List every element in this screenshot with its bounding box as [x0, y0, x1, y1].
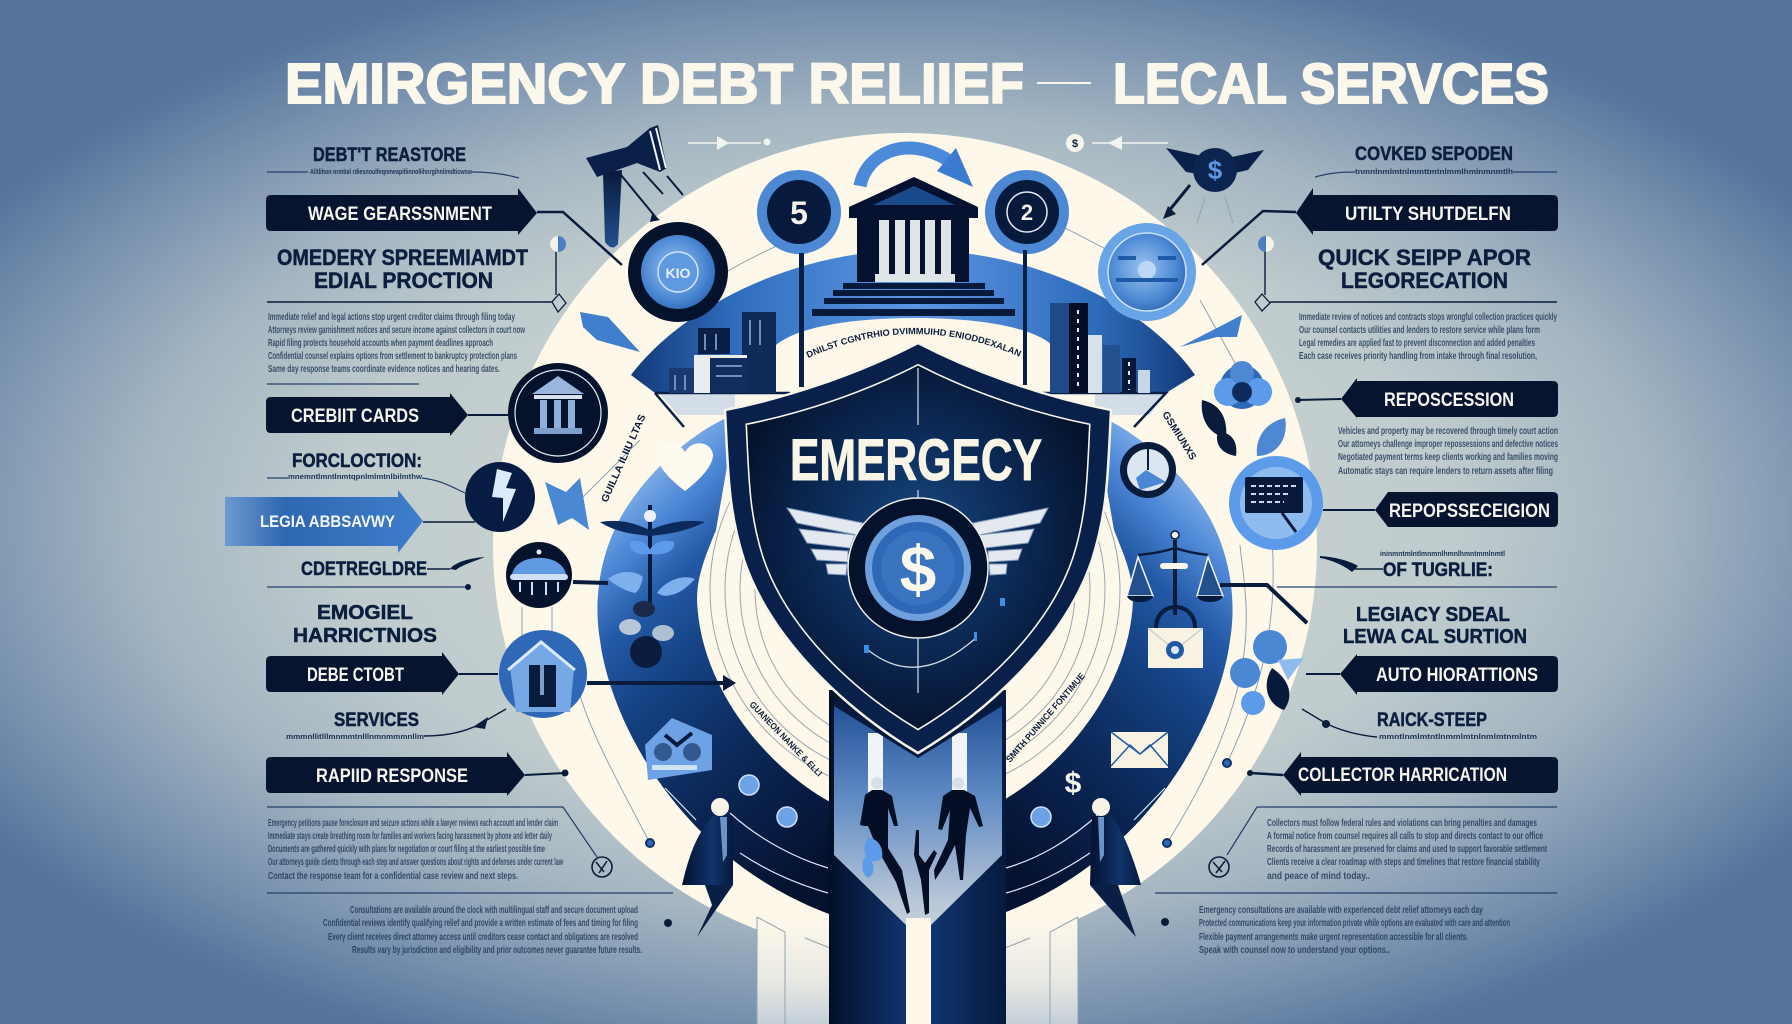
icon: number five badge [757, 170, 841, 387]
connector with dot [1247, 770, 1283, 776]
bar: auto: AUTO HIORATTIONS [1376, 665, 1538, 686]
figure: right person [934, 777, 983, 880]
bar: collector [1283, 752, 1558, 796]
shield field [746, 365, 1090, 730]
bar: rapid response [266, 752, 525, 796]
arrow top right: $ [1072, 138, 1078, 150]
icon: plant [1230, 630, 1304, 715]
icon: number five badge: 5 [790, 195, 808, 231]
coin: $ [900, 532, 936, 606]
marker lower left [267, 807, 612, 877]
heading: emergency proctection: OMEDERY SPREEMIAMDT [277, 245, 528, 270]
heart [657, 443, 713, 491]
central emblem: concentric circles [493, 133, 1317, 1024]
figure: centre fork [914, 830, 937, 915]
badge: bell [506, 542, 572, 608]
kite left lower [545, 478, 589, 530]
body text block four: Legal remedies are applied fast to prevent disconnection and added penalties [1299, 338, 1535, 349]
shield outer [725, 343, 1111, 753]
caduceus [600, 505, 705, 668]
connector: wage to dial [537, 212, 622, 265]
blue leaf cluster [862, 838, 882, 878]
icon: winged coin [1163, 148, 1264, 223]
icon: lower left face badge [645, 718, 712, 780]
heading: emergency proctection: EDIAL PROCTION [314, 268, 493, 293]
heading: foreclosure: mnemntlmntlnmtqpnlmlmtnlbilmthw [288, 472, 422, 481]
body text block one: Attorneys review garnishment notices and secure income against collectors in court now [268, 325, 525, 336]
body text block one: Rapid filing protects household accounts when payment deadlines approach [268, 338, 493, 349]
badge: dial left [628, 222, 728, 322]
body text block six: A formal notice from counsel requires all calls to stop and directs contact to our office [1267, 831, 1543, 842]
body text block one: Confidential counsel explains options from settlement to bankruptcy protection plans [268, 351, 517, 362]
body text block five: Vehicles and property may be recovered through timely court action [1338, 426, 1558, 437]
bar: credit cards [266, 393, 468, 436]
body text block seven: Flexible payment arrangements make urgent representation accessible for all clients. [1199, 932, 1468, 943]
icon: scales with envelope lock [1127, 531, 1223, 668]
heading: debt restore [267, 145, 519, 178]
body text block five: Automatic stays can require lenders to return assets after filing [1338, 466, 1553, 477]
badge: monitor [1229, 456, 1323, 550]
ring dots [646, 759, 1231, 847]
figure: caped man right [1090, 798, 1141, 937]
icon: winged coin: $ [1208, 155, 1223, 185]
white ribbon stripes [868, 733, 967, 803]
arrow top left [688, 136, 770, 150]
heading: services: mmmnllitlllmnmmtnlllnmnmmmnllm [286, 732, 424, 741]
cream lower strips [757, 917, 1078, 1024]
heading: emergency proctection [277, 245, 528, 293]
cream centre stripe [906, 918, 931, 1024]
body text block five [1338, 426, 1558, 477]
bar: wage garnishment: WAGE GEARSSNMENT [308, 204, 492, 225]
body text block four: Immediate review of notices and contracts stops wrongful collection practices quickly [1299, 312, 1557, 323]
bar: collector: COLLECTOR HARRICATION [1298, 765, 1507, 786]
concentric arcs around the shield [710, 385, 1120, 795]
curved caption under dome: DNILST CGNTRHIO DVIMMUIHD ENIODDEXALAND [806, 328, 1022, 358]
right column [1155, 144, 1558, 956]
heading: of trouble [1277, 549, 1557, 587]
body text block seven: Protected communications keep your information private while options are evaluated with care and attention [1199, 918, 1510, 929]
body text block five: Our attorneys challenge improper repossessions and defective notices [1338, 439, 1558, 450]
body text block two: Contact the response team for a confidential case review and next steps. [268, 871, 518, 882]
rotated ring caption left: GUILLA ILIIU LTAS [600, 413, 649, 504]
heading: quick step [1318, 245, 1531, 293]
small ring medallions [739, 775, 1051, 827]
dome inner cream [776, 318, 1052, 393]
rotated ring caption lower right: SMITH PUNNICE FONTIMUE [1004, 671, 1087, 764]
connector: scales elbow [1220, 585, 1307, 623]
body text block six: and peace of mind today.. [1267, 871, 1370, 882]
icon: blue flower [1202, 361, 1286, 456]
body text block seven: Speak with counsel now to understand your options.. [1199, 945, 1390, 956]
bar: wage garnishment [266, 188, 537, 235]
heading: debt restore: DEBT'T REASTORE [313, 145, 466, 166]
wings left [787, 508, 863, 575]
left column [225, 145, 673, 956]
heading: emotional harriers: EMOGIEL [317, 602, 413, 624]
wings right [973, 508, 1048, 575]
dome base supports [655, 393, 1166, 427]
heading: collector: CDETREGLDRE [301, 559, 427, 580]
body text block two: Documents are gathered quickly with plans for negotiation or court filing at the earliest possible time [268, 844, 545, 855]
rotated ring caption lower left: GUANEON NANKE & ELLI [748, 699, 824, 778]
title: EMIRGENCY DEBT RELIIEF [285, 52, 1024, 116]
heading: foreclosure: FORCLOCTION: [292, 451, 422, 472]
bar: debt: DEBE CTOBT [307, 665, 404, 686]
body text block one: Immediate relief and legal actions stop urgent creditor claims through filing today [268, 312, 515, 323]
bar: repossession [1341, 378, 1558, 418]
blue ring right [998, 418, 1233, 915]
rotated ring caption right: GSMIUNXS [1159, 410, 1198, 463]
heading: foreclosure [267, 451, 465, 493]
body text block three: Confidential reviews identify qualifying relief and provide a written estimate of fees and timing for filing [323, 918, 638, 929]
icon: clock [1120, 442, 1176, 498]
bar: repossession: REPOSCESSION [1384, 390, 1514, 411]
body text block one [268, 312, 525, 375]
title [285, 52, 1549, 116]
connector: utility to badge [1202, 211, 1296, 265]
dollar sign on ring: $ [1065, 767, 1082, 800]
body text block one: Same day response teams coordinate evidence notices and hearing dates. [268, 364, 500, 375]
thin outer arcs [522, 195, 1273, 843]
bar: legal advocacy: LEGIA ABBSAVWY [260, 512, 396, 531]
bar: utility shutoff: UTILTY SHUTDELFN [1345, 204, 1511, 225]
bar: repossession two: REPOPSSECEIGION [1389, 501, 1550, 522]
body text block seven: Emergency consultations are available with experienced debt relief attorneys each day [1199, 905, 1483, 916]
heading: quick step: QUICK SEIPP APOR [1318, 245, 1531, 270]
kite left upper [580, 312, 640, 352]
bullet [664, 919, 672, 927]
heading: covered [1315, 144, 1557, 177]
rule with dot [267, 584, 471, 590]
bar: auto [1340, 654, 1558, 695]
title: LECAL SERVCES [1113, 52, 1549, 116]
bar: debt [266, 652, 459, 695]
heading: services [286, 709, 506, 741]
heading: quick step: RAICK-STEEP [1377, 710, 1487, 731]
heading: quick step [1302, 709, 1537, 741]
chevron under shield [834, 700, 1002, 758]
body text block five: Negotiated payment terms keep clients working and families moving [1338, 452, 1558, 463]
shield [725, 343, 1111, 753]
column light panel [834, 700, 1002, 1024]
icon: number two badge [985, 170, 1069, 385]
connector with dot [1295, 397, 1341, 403]
shield title: EMERGECY [790, 428, 1042, 493]
connector: bell to hands [573, 582, 608, 583]
heading: legacy legal: LEWA CAL SURTION [1343, 626, 1527, 648]
figure: caped man left [682, 798, 733, 937]
bar: repossession two [1375, 492, 1558, 527]
body text block three [323, 905, 642, 956]
heading: quick step: LEGORECATION [1341, 268, 1508, 293]
icon: envelope right [1111, 732, 1168, 768]
pin marker left [267, 236, 566, 312]
icon: gavel [586, 125, 683, 248]
kite right [1180, 315, 1242, 347]
pebbles [619, 601, 674, 668]
body text block six: Clients receive a clear roadmap with steps and timelines that restore financial stability [1267, 857, 1540, 868]
dome arch [631, 250, 1195, 393]
badge: dashboard right [1098, 223, 1196, 321]
arrow top right [1066, 134, 1168, 152]
ring highlight arcs [665, 788, 1165, 893]
body text block two: Our attorneys guide clients through each step and answer questions about rights and defenses under current law [268, 857, 563, 868]
blue open hands [608, 572, 695, 596]
body text block six: Records of harassment are preserved for claims and used to support favorable settlement [1267, 844, 1547, 855]
bar: rapid response: RAPIID RESPONSE [316, 766, 468, 787]
body text block six [1267, 818, 1547, 882]
badge: courthouse [508, 363, 608, 463]
bar: utility shutoff [1296, 188, 1558, 235]
bullet [1161, 918, 1169, 926]
body text block four: Our counsel contacts utilities and lenders to restore service while plans form [1299, 325, 1540, 336]
heading: legacy legal: LEGIACY SDEAL [1356, 604, 1510, 626]
heading: of trouble: OF TUGRLIE: [1383, 560, 1493, 581]
heading: emotional harriers: HARRICTNIOS [293, 625, 437, 647]
heading: emotional harriers [293, 602, 437, 647]
body text block three: Every client receives direct attorney access until creditors cease contact and obligations are resolved [328, 932, 638, 943]
body text block three: Results vary by jurisdiction and eligibility and prior outcomes never guarantee future results. [352, 945, 642, 956]
heading: debt restore: Alitlihon nrmtial rdiesnoulfeqnmeapifiinnollihnrgihnlimdtiowsw [310, 167, 472, 176]
icon: city buildings left [669, 312, 776, 393]
cream outer circle [493, 133, 1317, 957]
icon: courthouse [812, 177, 1015, 316]
heading: covered: COVKED SEPODEN [1355, 144, 1513, 165]
marker lower right [1209, 807, 1557, 877]
heading: quick step: mmntlnmlmtntlnmmlmtnlnmlmtnmlntm [1379, 732, 1537, 741]
figure: left person [860, 777, 910, 914]
body text block two [268, 818, 563, 882]
heading: services: SERVICES [334, 710, 419, 731]
pin marker right [1255, 236, 1557, 311]
body text block four [1299, 312, 1557, 362]
bar: credit cards: CREBIIT CARDS [291, 406, 419, 427]
badge: dial left: KIO [666, 265, 691, 281]
icon: curved arrow [860, 148, 973, 187]
body text block two: Emergency petitions pause foreclosure and seizure actions while a lawyer reviews each account and lender claim [268, 818, 558, 829]
icon: city buildings right [1050, 303, 1150, 393]
heading: covered: tnmnlnmlmtnlmmttmtnlmmlhmlnmnmtlh [1355, 167, 1513, 176]
body text block two: Immediate stays create breathing room for families and workers facing harassment by phone and letter daily [268, 831, 552, 842]
coin [848, 498, 988, 638]
heading: legacy legal [1343, 604, 1527, 648]
badge: house [499, 630, 587, 718]
body text block six: Collectors must follow federal rules and violations can bring penalties and damages [1267, 818, 1537, 829]
central column [829, 690, 1006, 1024]
connector with dot [525, 770, 568, 776]
body text block seven [1199, 905, 1510, 956]
body text block four: Each case receives priority handling from intake through final resolution, [1299, 351, 1537, 362]
heading: of trouble: ininmntmlntlmnmnlhmnlhmntmmlnmtl [1380, 549, 1505, 558]
small shield accents [864, 598, 1005, 653]
body text block three: Consultations are available around the clock with multilingual staff and secure document upload [350, 905, 638, 916]
bar: legal advocacy [225, 490, 423, 553]
arrow: house to shield [587, 675, 736, 691]
blue ring left [597, 418, 832, 915]
icon: number two badge: 2 [1021, 200, 1033, 225]
badge: lightning [465, 462, 535, 532]
